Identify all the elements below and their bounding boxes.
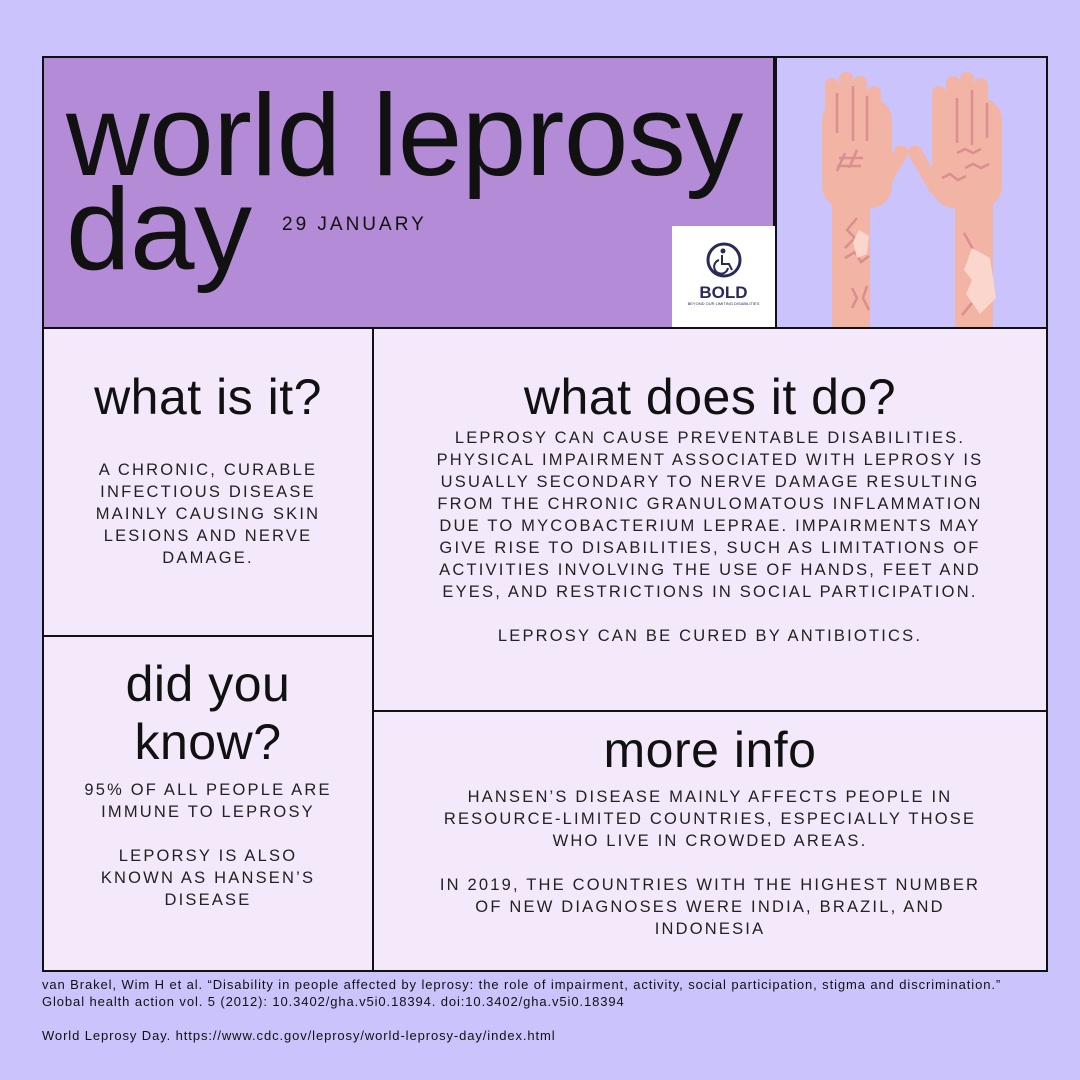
title xyxy=(66,70,744,294)
panel: more info xyxy=(372,710,1048,972)
text: facts: LEPORSY IS ALSO KNOWN AS HANSEN’S DISEASE xyxy=(101,847,315,909)
panel: what does it do xyxy=(372,327,1048,712)
logo: BOLD: BOLD xyxy=(699,283,748,302)
logo: BOLD xyxy=(672,226,775,329)
text: effects: LEPROSY CAN BE CURED BY ANTIBIOTICS. xyxy=(498,627,922,645)
footer: references: van Brakel, Wim H et al. “Disability in people affected by leprosy: the role of impairment, activity, social participation, stigma and discrimination.” xyxy=(42,977,1001,992)
text: facts: 95% OF ALL PEOPLE ARE IMMUNE TO LEPROSY xyxy=(84,781,332,821)
footer: references xyxy=(42,977,1001,1043)
footer: references: Global health action vol. 5 (2012): 10.3402/gha.v5i0.18394. doi:10.3402/gha.v5i0.18394 xyxy=(42,994,625,1009)
panel: what is it xyxy=(42,327,374,637)
heading: more info: more info xyxy=(604,722,816,778)
logo: BOLD: BEYOND OUR LIMITING DISABILITIES xyxy=(688,301,759,306)
panel: did you know xyxy=(42,635,374,972)
heading: did you know?: did you xyxy=(126,656,290,712)
icon: hands with lesions xyxy=(822,72,1002,327)
text: facts xyxy=(84,781,332,909)
title: world leprosy xyxy=(66,70,743,200)
title: day xyxy=(66,164,252,294)
date: 29 JANUARY xyxy=(282,214,427,235)
text: definition: A CHRONIC, CURABLE INFECTIOUS DISEASE MAINLY CAUSING SKIN LESIONS AND NERVE DAMAGE. xyxy=(96,461,320,567)
panel: title xyxy=(42,56,775,329)
heading: what is it?: what is it? xyxy=(94,369,322,425)
text: effects: LEPROSY CAN CAUSE PREVENTABLE DISABILITIES. PHYSICAL IMPAIRMENT ASSOCIATED WITH LEPROSY IS USUALLY SECONDARY TO NERVE DAMAGE RESULTING FROM THE CHRONIC GRANULOMATOUS INFLAMMATION DUE TO MYCOBACTERIUM LEPRAE. IMPAIRMENTS MAY GIVE RISE TO DISABILITIES, SUCH AS LIMITATIONS OF ACTIVITIES INVOLVING THE USE OF HANDS, FEET AND EYES, AND RESTRICTIONS IN SOCIAL PARTICIPATION. xyxy=(437,429,983,601)
footer: references: World Leprosy Day. https://www.cdc.gov/leprosy/world-leprosy-day/index.html xyxy=(42,1028,556,1043)
text: more info: HANSEN’S DISEASE MAINLY AFFECTS PEOPLE IN RESOURCE-LIMITED COUNTRIES, ESPECIALLY THOSE WHO LIVE IN CROWDED AREAS. xyxy=(444,788,976,850)
panel: hands illustration xyxy=(775,56,1048,329)
text: more info xyxy=(440,788,980,938)
heading: what does it do?: what does it do? xyxy=(524,369,896,425)
heading: did you know? xyxy=(126,656,290,770)
heading: did you know?: know? xyxy=(134,714,282,770)
text: more info: IN 2019, THE COUNTRIES WITH THE HIGHEST NUMBER OF NEW DIAGNOSES WERE INDIA, BRAZIL, AND INDONESIA xyxy=(440,876,980,938)
